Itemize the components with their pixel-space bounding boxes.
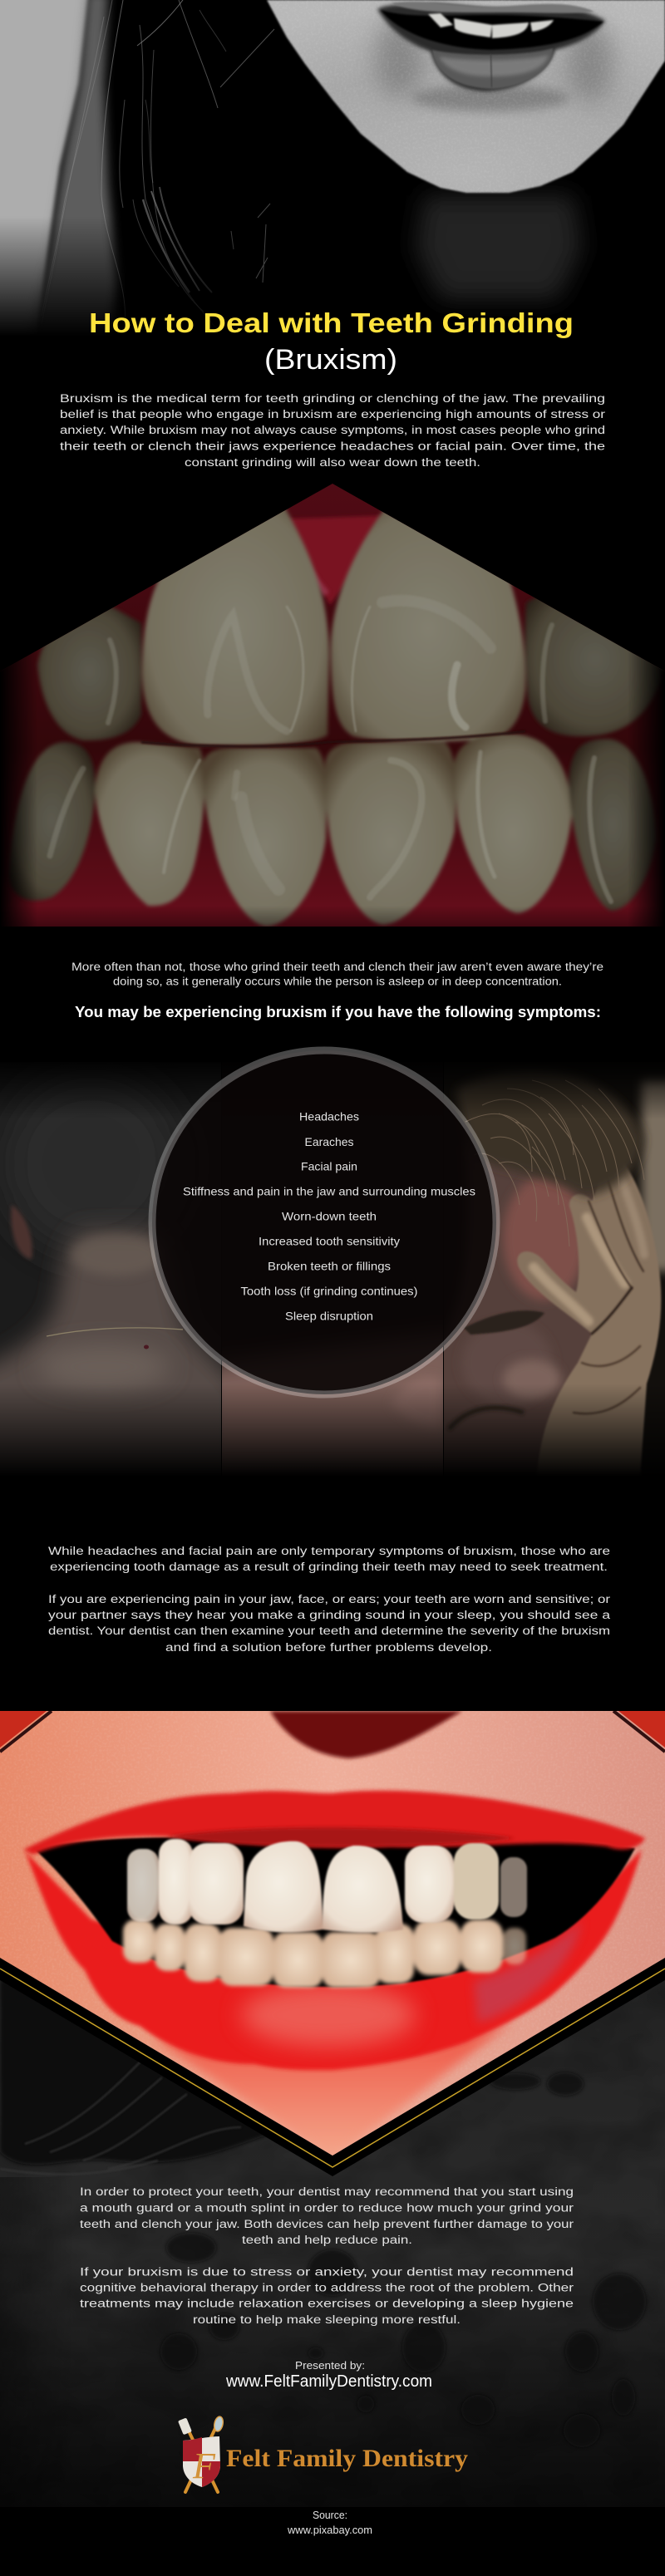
text: when to seek treatment: dentist. Your dentist can then examine your teeth and determine the severity of the bruxism: [48, 1625, 610, 1638]
face: [444, 1157, 596, 1466]
text: awareness note: More often than not, those who grind their teeth and clench their jaw aren’t even aware they’re: [71, 961, 603, 974]
black chevron with gold line: [0, 1936, 665, 2176]
lower lip: [25, 1850, 642, 2070]
chin below lip: [150, 2019, 515, 2161]
text: when to seek treatment: If you are experiencing pain in your jaw, face, or ears; your teeth are worn and sensitive; or: [48, 1593, 610, 1606]
text: awareness note: [71, 961, 603, 989]
upper teeth: [127, 1839, 527, 1933]
text: treatment options: [80, 2185, 574, 2327]
symptom list: [183, 1110, 475, 1322]
symptom list: Headaches: [299, 1110, 359, 1123]
title: (Bruxism): [264, 344, 397, 376]
textured grunge background: [0, 1936, 665, 2507]
intro paragraph: constant grinding will also wear down the teeth.: [185, 456, 480, 469]
symptom list: Earaches: [304, 1135, 354, 1148]
nose shadow: [270, 1711, 462, 1758]
text: when to seek treatment: While headaches and facial pain are only temporary symptoms of bruxism, those who are: [48, 1545, 610, 1558]
title: [89, 307, 574, 376]
source credit: Source:: [313, 2510, 347, 2521]
panel: close-up teeth photo in pentagon: [0, 482, 665, 927]
icon: crossed toothbrush and mirror: [185, 2422, 218, 2492]
hero photo: woman's chin and mouth: [0, 0, 665, 331]
mouth opening: [33, 1837, 635, 1987]
photo: man holding his face: [432, 1062, 665, 1479]
intro paragraph: [60, 392, 605, 469]
presented by: Presented by:: [295, 2359, 365, 2372]
photo: back of neck: [0, 1072, 221, 1467]
logo: Felt Family Dentistry: Felt Family Dentistry: [226, 2445, 468, 2472]
text: treatment options: teeth and help reduce pain.: [242, 2234, 412, 2247]
text: treatment options: teeth and clench your jaw. Both devices can help prevent further damage to your: [80, 2218, 574, 2231]
upper gum highlight: [290, 514, 392, 605]
teeth: [428, 13, 554, 38]
intro paragraph: belief is that people who engage in bruxism are experiencing high amounts of stress or: [60, 408, 605, 421]
tooth wear streaks: [50, 601, 611, 902]
panel: three photo strip of pain areas: [0, 1057, 665, 1496]
photo: ear close-up: [222, 1338, 443, 1471]
intro paragraph: Bruxism is the medical term for teeth grinding or clenching of the jaw. The prevailing: [60, 392, 605, 406]
symptoms circle: [152, 1050, 496, 1394]
text: awareness note: doing so, as it generally occurs while the person is asleep or in deep concentration.: [113, 976, 562, 989]
icon: shield: F: [192, 2446, 216, 2486]
symptom list: Tooth loss (if grinding continues): [241, 1285, 417, 1298]
gap between arches: [141, 731, 525, 746]
upper lip: [23, 1791, 645, 1855]
icon: shield: [183, 2436, 220, 2487]
presented by: [225, 2359, 432, 2391]
text: treatment options: treatments may include relaxation exercises or developing a sleep hygiene: [80, 2298, 574, 2311]
text: treatment options: routine to help make sleeping more restful.: [193, 2313, 461, 2327]
column dividers: [221, 1062, 444, 1476]
text: treatment options: cognitive behavioral therapy in order to address the root of the problem. Other: [80, 2282, 574, 2295]
text: when to seek treatment: experiencing tooth damage as a result of grinding their teeth may need to seek treatment.: [50, 1561, 608, 1574]
presented by: www.FeltFamilyDentistry.com: [225, 2372, 432, 2391]
text: treatment options: a mouth guard or a mouth splint in order to reduce how much your grind your: [80, 2202, 574, 2215]
text: when to seek treatment: your partner says they hear you make a grinding sound in your sleep, you should see a: [48, 1609, 610, 1622]
symptom list: Facial pain: [301, 1160, 357, 1173]
source credit: www.pixabay.com: [287, 2524, 372, 2536]
lower teeth: [123, 1920, 526, 1988]
text: when to seek treatment: [48, 1545, 610, 1654]
text: when to seek treatment: and find a solution before further problems develop.: [165, 1641, 492, 1654]
teeth: [8, 482, 665, 927]
text: treatment options: If your bruxism is due to stress or anxiety, your dentist may recommend: [80, 2265, 574, 2279]
corner wedges: [0, 1711, 47, 1748]
logo: Felt Family Dentistry: [178, 2416, 468, 2492]
symptom list: Sleep disruption: [285, 1309, 373, 1322]
title: How to Deal with Teeth Grinding: [89, 307, 574, 338]
hand: [517, 1143, 661, 1479]
symptom list: Increased tooth sensitivity: [259, 1235, 400, 1248]
symptom list: Stiffness and pain in the jaw and surrounding muscles: [183, 1184, 475, 1197]
symptom list: Worn-down teeth: [282, 1210, 377, 1223]
heading: symptoms: You may be experiencing bruxism if you have the following symptoms:: [75, 1004, 601, 1020]
hair: [456, 1070, 644, 1197]
intro paragraph: their teeth or clench their jaws experience headaches or facial pain. Over time, the: [60, 440, 605, 454]
panel: grinning mouth photo: [0, 1711, 665, 2161]
source credit: [287, 2510, 372, 2536]
intro paragraph: anxiety. While bruxism may not always cause symptoms, in most cases people who grind: [60, 424, 605, 437]
symptom list: Broken teeth or fillings: [268, 1259, 391, 1272]
lips and open mouth: [377, 3, 605, 91]
text: treatment options: In order to protect your teeth, your dentist may recommend that you start using: [80, 2185, 574, 2199]
neck shadow: [416, 195, 582, 299]
